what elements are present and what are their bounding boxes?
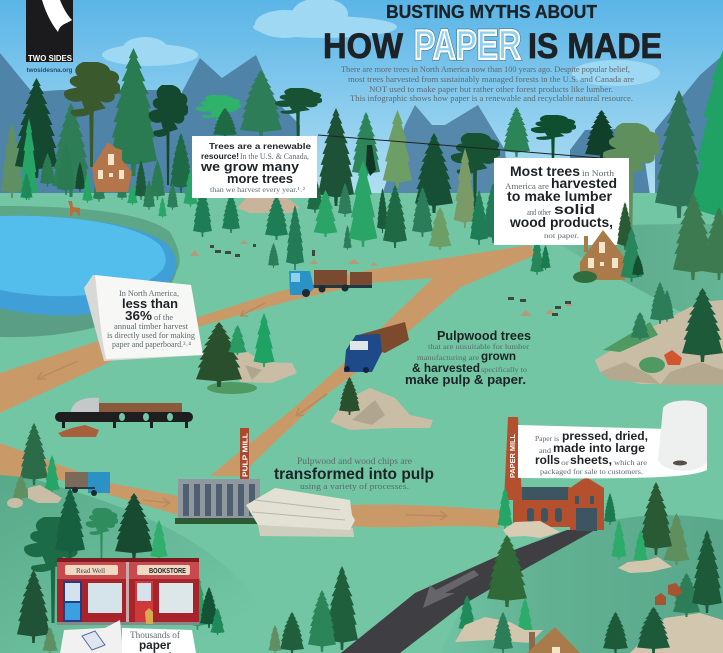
text: transformed into pulp: using a variety of processes. — [300, 481, 409, 491]
arrow: asphalt road — [423, 570, 479, 608]
callout: thousands of paper products: paper — [139, 638, 171, 652]
right hill — [440, 515, 723, 653]
text: pulpwood trees: that are unsuitable for lumber — [428, 342, 530, 351]
icon: deer — [68, 201, 80, 216]
callout: most trees harvested: America are — [505, 182, 549, 191]
intro text — [341, 64, 634, 103]
newspaper callout: 36% — [84, 275, 203, 361]
newspaper callout: 36%: of the — [154, 313, 173, 322]
callout: renewable resource: resource! — [201, 151, 239, 161]
callout: paper roll: or — [561, 458, 570, 467]
callout: paper roll: packaged for sale to customers. — [540, 467, 643, 476]
text: transformed into pulp: transformed into pulp — [274, 466, 434, 483]
paper mill: PAPER MILL — [510, 433, 517, 478]
callout: thousands of paper products: Thousands of — [130, 630, 180, 640]
callout: paper roll: Paper is — [535, 434, 559, 443]
intro text: NOT used to make paper but rather other forest products like lumber. — [369, 84, 613, 94]
callout: paper roll: pressed, dried, — [562, 429, 648, 443]
intro text: most trees harvested from sustainably managed forests in the U.S. and Canada are — [348, 74, 634, 84]
cabin: left forest — [92, 142, 132, 192]
callout: paper roll: made into large — [553, 441, 645, 455]
truck: blue logging, upper road — [289, 270, 372, 297]
callout: most trees harvested: solid — [554, 202, 595, 217]
intro text: This infographic shows how paper is a renewable and recyclable natural resource. — [350, 93, 633, 103]
callout: renewable resource: we grow many — [200, 159, 300, 174]
sky background — [0, 0, 723, 200]
lower left forest — [17, 488, 225, 653]
paper mill — [497, 417, 616, 538]
rocks and trees: right — [595, 282, 723, 385]
callout: most trees harvested: wood products, — [509, 215, 613, 230]
title: PAPER — [414, 21, 521, 68]
logo: Two Sides: twosidesna.org — [26, 67, 73, 74]
callout: renewable resource: Trees are a renewable — [209, 141, 311, 151]
asphalt road — [341, 530, 595, 653]
pulp mill — [175, 428, 260, 524]
callout: renewable resource: In the U.S. & Canada, — [240, 152, 309, 161]
newspaper callout: 36%: is directly used for making — [107, 331, 195, 340]
left hill — [0, 468, 310, 653]
callout: most trees harvested: harvested — [551, 176, 617, 191]
callout: renewable resource: more trees — [227, 171, 293, 186]
callout: renewable resource — [192, 136, 317, 198]
logo: Two Sides: TWO SIDES — [28, 54, 73, 63]
text: pulpwood trees: manufacturing are — [417, 353, 480, 362]
callout: most trees harvested: not paper. — [544, 231, 579, 240]
newspaper callout: 36%: 36% — [125, 308, 152, 323]
front forest row — [20, 160, 240, 237]
text: pulpwood trees — [405, 329, 531, 387]
clouds — [102, 0, 660, 86]
left mid trees and truck — [7, 423, 110, 508]
lake — [0, 206, 180, 337]
mountains — [0, 53, 723, 200]
callout: paper roll: and — [539, 446, 551, 455]
title: IS MADE — [528, 27, 662, 66]
callout: most trees harvested: Most trees — [510, 164, 580, 179]
bookstore: Read Well — [76, 567, 105, 575]
text: pulpwood trees: make pulp & paper. — [405, 373, 526, 387]
callout: most trees harvested: and other — [527, 208, 551, 217]
callout: most trees harvested: to make lumber — [507, 189, 613, 204]
rocks and trees: centre left — [196, 313, 297, 394]
callout: paper roll: which are — [614, 458, 648, 467]
road network — [0, 245, 535, 528]
back forest — [1, 48, 723, 280]
bookstore — [57, 558, 199, 625]
darker hill upper right — [540, 224, 723, 335]
callout: renewable resource: than we harvest every year.¹˒² — [210, 185, 306, 194]
lower right trees and rocks — [455, 482, 723, 653]
newspaper callout: 36%: less than — [122, 296, 178, 311]
logo: Two Sides — [26, 0, 73, 74]
callout: paper roll: rolls — [535, 453, 560, 467]
cabin: lumber — [573, 227, 644, 283]
text: transformed into pulp — [274, 456, 434, 491]
callout: most trees harvested — [494, 158, 629, 245]
newspaper callout: 36%: annual timber harvest — [114, 322, 189, 331]
newspaper callout: 36%: paper and paperboard.³˒⁴ — [112, 340, 191, 349]
pulp mill: PULP MILL — [242, 432, 250, 477]
rocks and tree: centre — [330, 377, 433, 430]
road arrows — [37, 303, 447, 520]
stack of pulp sheets — [246, 488, 355, 537]
title — [323, 2, 662, 68]
trees in front of callout — [617, 202, 633, 250]
callout: paper roll: sheets, — [570, 453, 612, 467]
cable line with climber — [318, 135, 625, 176]
callout: thousands of paper products — [60, 620, 196, 653]
title: PAPER — [414, 21, 521, 68]
text: pulpwood trees: grown — [481, 349, 516, 363]
ground — [0, 193, 723, 653]
stumps and mounds — [190, 240, 573, 316]
callout: paper roll — [518, 400, 707, 478]
front forest right of first callout — [265, 160, 551, 275]
bookstore: BOOKSTORE — [149, 568, 186, 575]
text: pulpwood trees: Pulpwood trees — [437, 329, 531, 343]
intro text: There are more trees in North America now than 100 years ago. Despite popular belief, — [341, 64, 630, 74]
truck: navy logging, pulpwood road — [344, 322, 409, 373]
title: BUSTING MYTHS ABOUT — [386, 2, 597, 22]
newspaper callout: 36%: In North America, — [119, 288, 179, 298]
conveyor and log — [55, 398, 193, 437]
text: pulpwood trees: & harvested — [412, 361, 480, 375]
callout: most trees harvested: in North — [582, 169, 614, 178]
title: HOW — [323, 27, 403, 66]
text: pulpwood trees: specifically to — [481, 365, 527, 374]
lower centre trees — [268, 566, 358, 653]
rocks behind first callout — [237, 192, 300, 213]
text: transformed into pulp: Pulpwood and wood chips are — [297, 456, 412, 466]
